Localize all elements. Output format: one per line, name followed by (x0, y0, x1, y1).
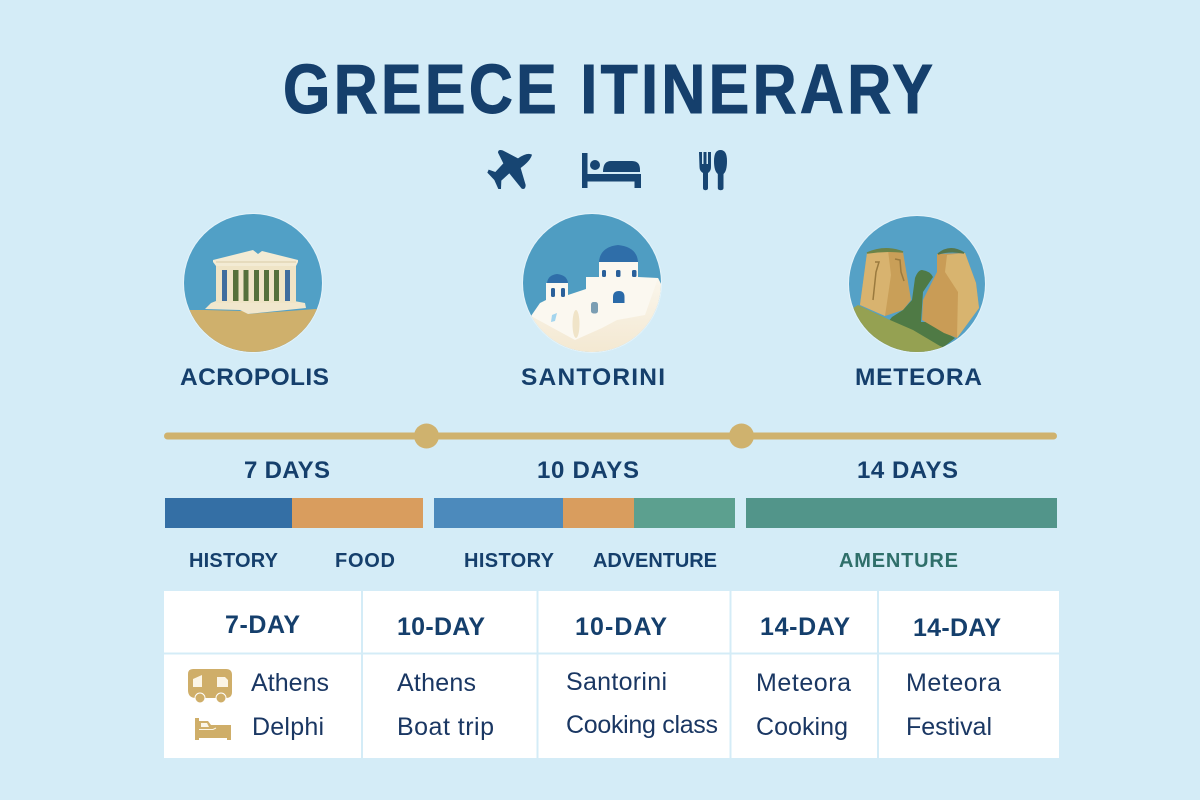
icon: fork and spoon (699, 150, 727, 190)
icon: bed (582, 153, 641, 188)
icon: bed (195, 718, 231, 740)
timeline marker 1 (414, 424, 439, 448)
icon row: travel, stay, food (487, 150, 727, 190)
label: Santorini: SANTORINI (521, 364, 665, 391)
duration: 10 days: 10 DAYS (537, 457, 639, 484)
segmented bar: 7 days (165, 498, 423, 528)
panel: Meteora illustration (848, 215, 986, 353)
table row texts (251, 668, 1001, 741)
table row texts: Festival (906, 713, 992, 741)
bar label: food: FOOD (335, 550, 395, 572)
label: Meteora: METEORA (855, 364, 982, 391)
icon: airplane (487, 150, 532, 189)
segmented bar: 14 days (746, 498, 1057, 528)
timeline marker 2 (729, 424, 754, 448)
title: GREECE ITINERARY (283, 50, 933, 128)
table row texts: Santorini (566, 668, 667, 696)
table row texts: Cooking class (566, 711, 718, 739)
table header: 14-day: 14-DAY (913, 614, 1001, 642)
panel: Acropolis illustration (183, 213, 323, 353)
table header: 10-day: 10-DAY (397, 613, 485, 641)
table row texts: Meteora (756, 669, 851, 697)
duration: 7 days: 7 DAYS (244, 457, 330, 484)
timeline (164, 424, 1057, 448)
bar label: history: HISTORY (464, 550, 555, 572)
bar label: history: HISTORY (189, 550, 279, 572)
table row texts: Boat trip (397, 713, 494, 741)
table header: 7-day: 7-DAY (225, 611, 300, 639)
table header: 10-day: 10-DAY (575, 613, 667, 641)
table header: 14-day: 14-DAY (760, 613, 850, 641)
panel: Santorini illustration (522, 213, 662, 353)
icon: bus (188, 669, 232, 703)
table row texts: Cooking (756, 713, 848, 741)
label: Acropolis: ACROPOLIS (180, 364, 329, 391)
bar label: amenture: AMENTURE (839, 550, 958, 572)
table row texts: Delphi (252, 713, 324, 741)
duration: 14 days: 14 DAYS (857, 457, 958, 484)
table row texts: Athens (251, 669, 329, 697)
bar label: adventure: ADVENTURE (593, 550, 717, 572)
segmented bar: 10 days (434, 498, 735, 528)
table row texts: Meteora (906, 669, 1001, 697)
table row texts: Athens (397, 669, 476, 697)
itinerary table (164, 591, 1059, 758)
